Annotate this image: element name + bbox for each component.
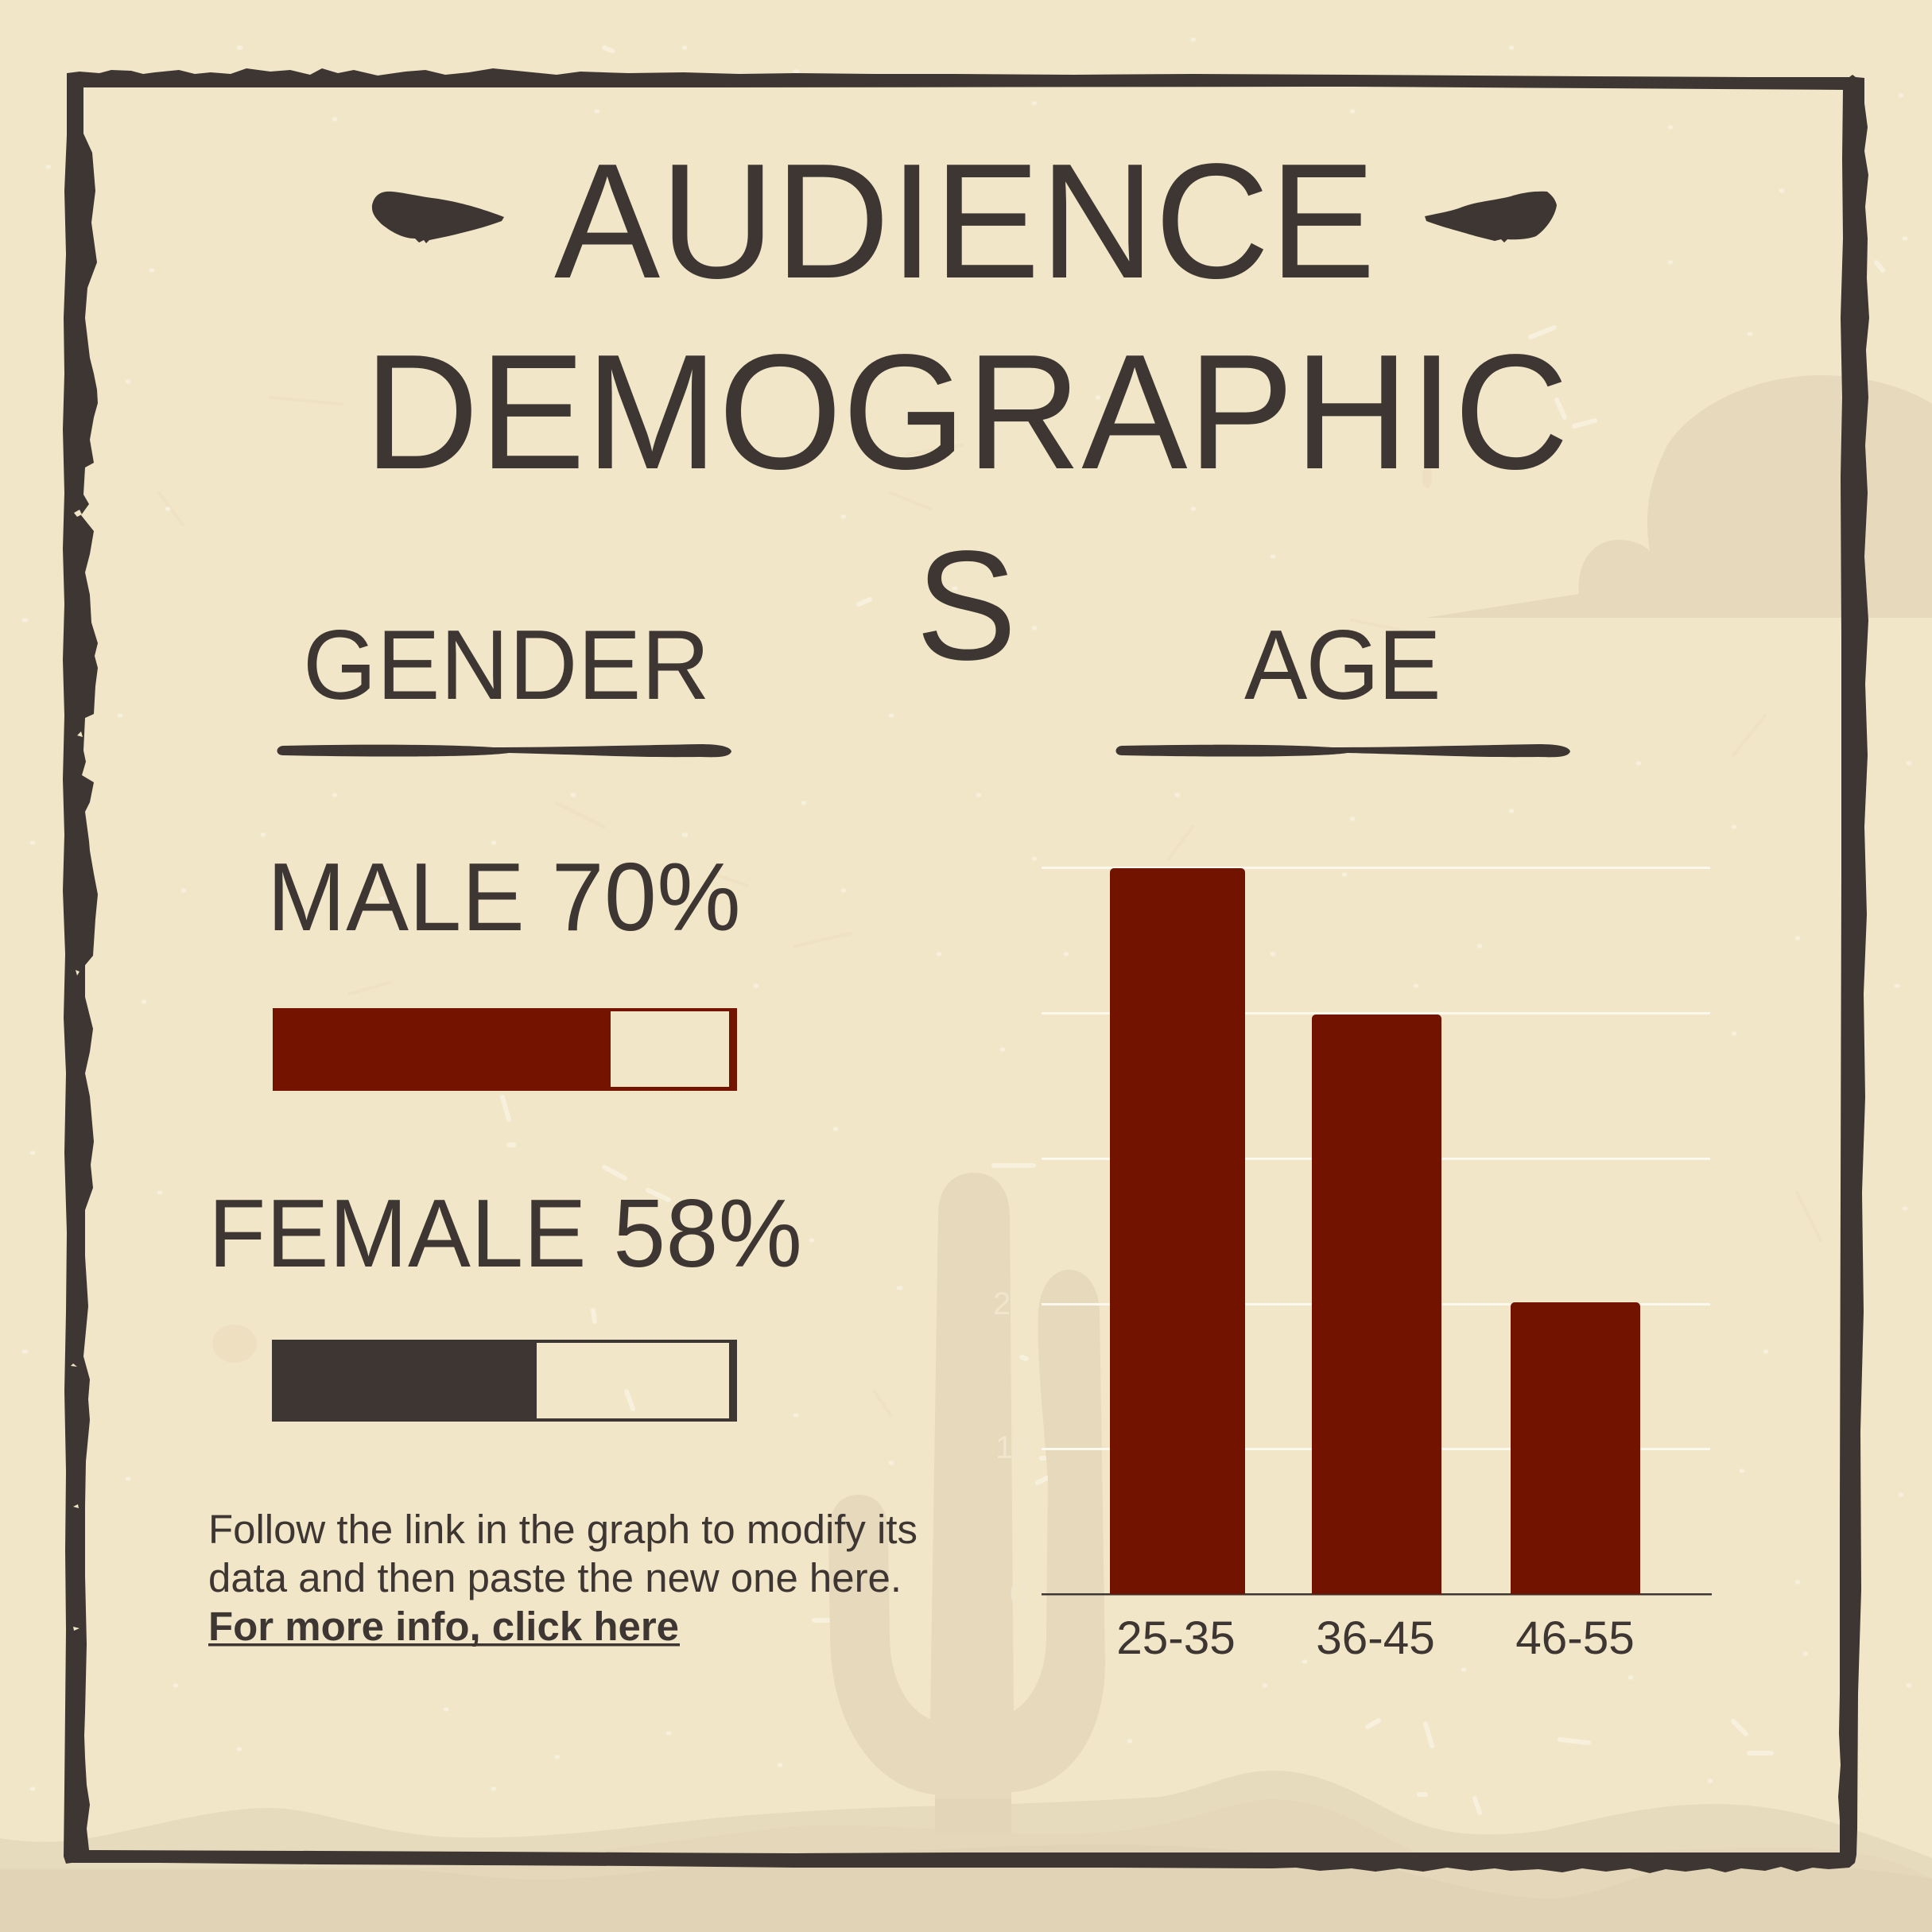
bar chart: age distribution [1042,867,1712,1664]
panel: age [993,610,1712,1664]
progress bar: female 58% [272,1340,737,1422]
heading: age: AGE [1244,610,1441,720]
text block: instructions: Follow the link in the graph to modify its [208,1507,918,1552]
underline: age [1116,744,1570,757]
chart: faint axis labels: 2 [993,1286,1011,1321]
label: female: FEMALE 58% [208,1179,802,1287]
heading: gender: GENDER [303,610,710,720]
underline: gender [277,744,731,757]
chart: faint axis labels: 0 [1010,1577,1027,1612]
progress bar: male 70% [273,1008,737,1091]
title: S [916,518,1017,692]
chart: faint axis labels [993,1286,1030,1612]
title: DEMOGRAPHIC [364,320,1569,504]
text block: instructions: For more info, click here [208,1604,679,1649]
text block: instructions [208,1507,918,1649]
label: male: MALE 70% [267,843,741,951]
axis labels: 46-55 [1515,1612,1635,1664]
text block: instructions: data and then paste the new one here. [208,1555,902,1600]
axis labels [1116,1612,1635,1664]
panel: gender [208,610,802,1422]
title: AUDIENCE [554,130,1375,313]
axis labels: 25-35 [1116,1612,1236,1664]
background: dunes [0,1771,1932,1932]
title [364,130,1569,692]
icon: right feather [1425,192,1557,242]
bar: 46-55 [1511,1302,1640,1594]
background: cactus [828,1173,1105,1834]
icon: left feather [372,192,504,243]
axis labels: 36-45 [1316,1612,1435,1664]
bar: 36-45 [1312,1014,1441,1594]
bar: 25-35 [1110,868,1245,1594]
background: mountain silhouette [1426,375,1932,618]
chart: faint axis labels: 10 [995,1430,1030,1465]
